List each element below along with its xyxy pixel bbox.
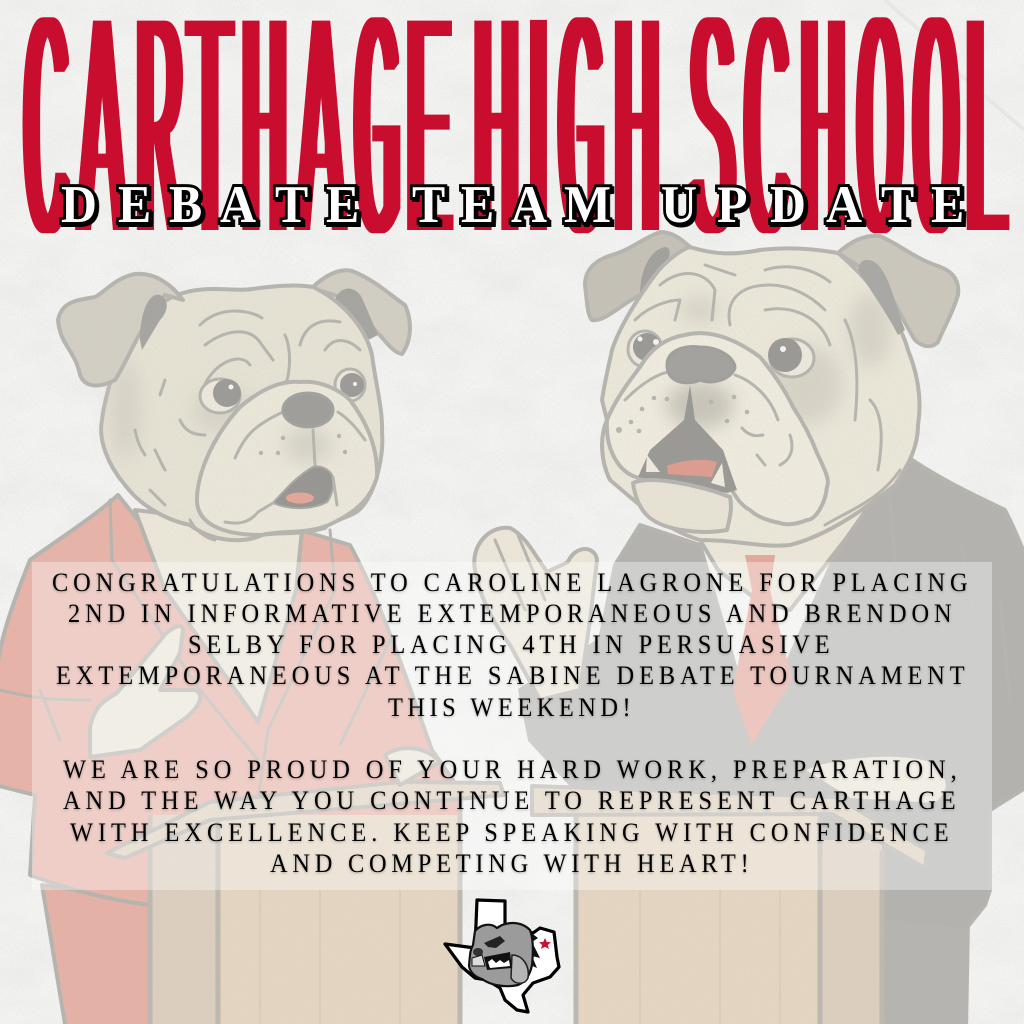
- left dog left eye: [200, 379, 241, 413]
- right lectern top ledge: [532, 786, 927, 868]
- bulldog brow and eye: [484, 936, 505, 948]
- right dog teeth: [646, 455, 725, 487]
- first paragraph: [52, 567, 968, 722]
- hand: left dog on lectern: [385, 748, 440, 785]
- left dog shirt: [135, 510, 302, 722]
- announcement text: [52, 567, 968, 878]
- podium: left lectern: [107, 782, 504, 1024]
- right dog left ear: [585, 232, 690, 320]
- second paragraph: AND THE WAY YOU CONTINUE TO REPRESENT CARTHAGE: [63, 785, 956, 815]
- translucent text panel: [32, 562, 992, 890]
- title: [23, 0, 1009, 336]
- right dog left eye: [628, 331, 662, 367]
- logo: Texas bulldog: [445, 900, 559, 1012]
- right dog nose: [667, 347, 735, 383]
- left dog head: [101, 286, 382, 540]
- right dog muzzle: [607, 333, 828, 524]
- second paragraph: WE ARE SO PROUD OF YOUR HARD WORK, PREPARATION,: [63, 754, 957, 784]
- hand: right dog raised: [474, 528, 597, 700]
- red star: [539, 938, 551, 949]
- right dog lower lip: [633, 480, 731, 532]
- right dog face shading: [680, 292, 892, 425]
- first paragraph: EXTEMPORANEOUS AT THE SABINE DEBATE TOURNAMENT: [56, 660, 965, 690]
- right dog right ear: [838, 236, 958, 346]
- hand: right dog on lectern: [802, 755, 948, 805]
- left dog muzzle dots: [259, 434, 347, 455]
- left dog right ear: [312, 270, 410, 354]
- left dog muzzle shading: [284, 427, 332, 463]
- left dog muzzle: [197, 382, 377, 535]
- first paragraph: CONGRATULATIONS TO CAROLINE LAGRONE FOR PLACING: [52, 567, 968, 597]
- right dog jacket: [520, 455, 1024, 930]
- Texas outline: [445, 900, 559, 1012]
- left dog jacket: [0, 495, 460, 905]
- right dog mouth: [638, 385, 737, 493]
- left dog tongue: [286, 492, 314, 504]
- right dog muzzle shading: [666, 381, 734, 429]
- subtitle: DEBATE TEAM UPDATE: [61, 176, 964, 234]
- right dog right eye: [768, 338, 814, 377]
- left dog brow and face wrinkles: [135, 311, 360, 540]
- left dog face shading: [109, 360, 252, 460]
- bulldog jowl: [511, 955, 528, 983]
- podium: right lectern: [532, 786, 927, 1024]
- collar spikes: [528, 932, 540, 968]
- second paragraph: [63, 754, 957, 878]
- right dog shirt: [700, 455, 905, 610]
- bulldog mouth: [484, 952, 512, 970]
- right dog trousers: [880, 900, 968, 1024]
- left dog trousers: [42, 885, 150, 1024]
- left dog nose: [283, 393, 333, 427]
- right dog muzzle dots: [616, 395, 749, 433]
- right dog tongue: [667, 460, 717, 477]
- left dog right eye: [335, 369, 365, 401]
- right dog head: [602, 247, 920, 546]
- bulldog nose: [473, 948, 483, 956]
- illustration: left bulldog debater: [0, 270, 460, 1024]
- left dog mouth: [273, 467, 333, 508]
- illustration: right bulldog debater: [520, 232, 1024, 1024]
- bulldog head: [469, 923, 533, 986]
- left lectern top ledge: [107, 782, 504, 858]
- first paragraph: THIS WEEKEND!: [388, 692, 631, 722]
- right dog necktie: [733, 555, 792, 745]
- first paragraph: SELBY FOR PLACING 4TH IN PERSUASIVE: [188, 629, 830, 659]
- left dog left ear: [58, 274, 183, 385]
- first paragraph: 2ND IN INFORMATIVE EXTEMPORANEOUS AND BRENDON: [68, 598, 952, 628]
- second paragraph: WITH EXCELLENCE. KEEP SPEAKING WITH CONFIDENCE: [70, 817, 949, 847]
- hand: left dog pointing: [90, 626, 200, 757]
- right dog brow and face wrinkles: [635, 265, 900, 525]
- second paragraph: AND COMPETING WITH HEART!: [270, 848, 749, 878]
